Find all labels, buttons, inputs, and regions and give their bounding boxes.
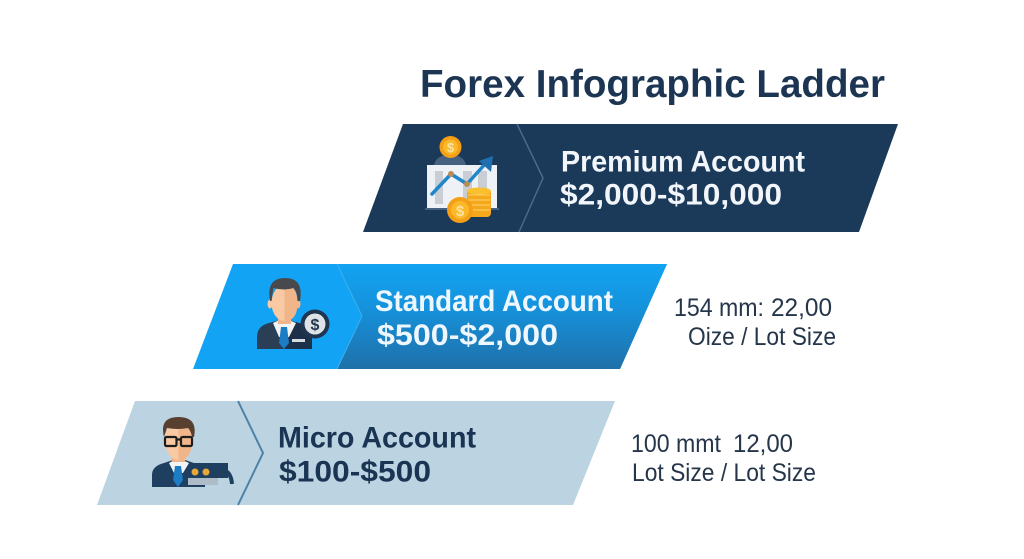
icon: businessman with card — [152, 417, 232, 487]
icon: chart with coins: $ — [447, 140, 455, 155]
side note: micro account: 12,00 — [733, 430, 793, 458]
title: Forex Infographic Ladder — [420, 63, 885, 106]
side note: standard account: Oize / Lot Size — [688, 323, 836, 351]
icon: chart with coins — [425, 136, 499, 223]
side note: standard account: 154 mm: — [674, 294, 764, 322]
side note: micro account: Lot Size / Lot Size — [632, 459, 816, 487]
side note: standard account: 22,00 — [771, 294, 832, 322]
price: premium account: $2,000-$10,000 — [560, 178, 782, 212]
icon: businessman with dollar: $ — [311, 317, 320, 334]
icon: businessman with dollar — [257, 278, 330, 349]
panel: micro account — [97, 401, 615, 505]
panel: standard account — [193, 264, 667, 369]
price: standard account: $500-$2,000 — [377, 319, 558, 352]
side note: micro account — [631, 430, 816, 487]
heading: premium account: Premium Account — [561, 146, 805, 178]
panel: premium account — [363, 124, 898, 232]
side note: micro account: 100 mmt — [631, 430, 721, 458]
heading: micro account: Micro Account — [278, 422, 476, 454]
heading: standard account: Standard Account — [375, 285, 613, 318]
icon: chart with coins: $ — [456, 203, 465, 220]
side note: standard account — [674, 294, 836, 351]
price: micro account: $100-$500 — [279, 456, 431, 488]
